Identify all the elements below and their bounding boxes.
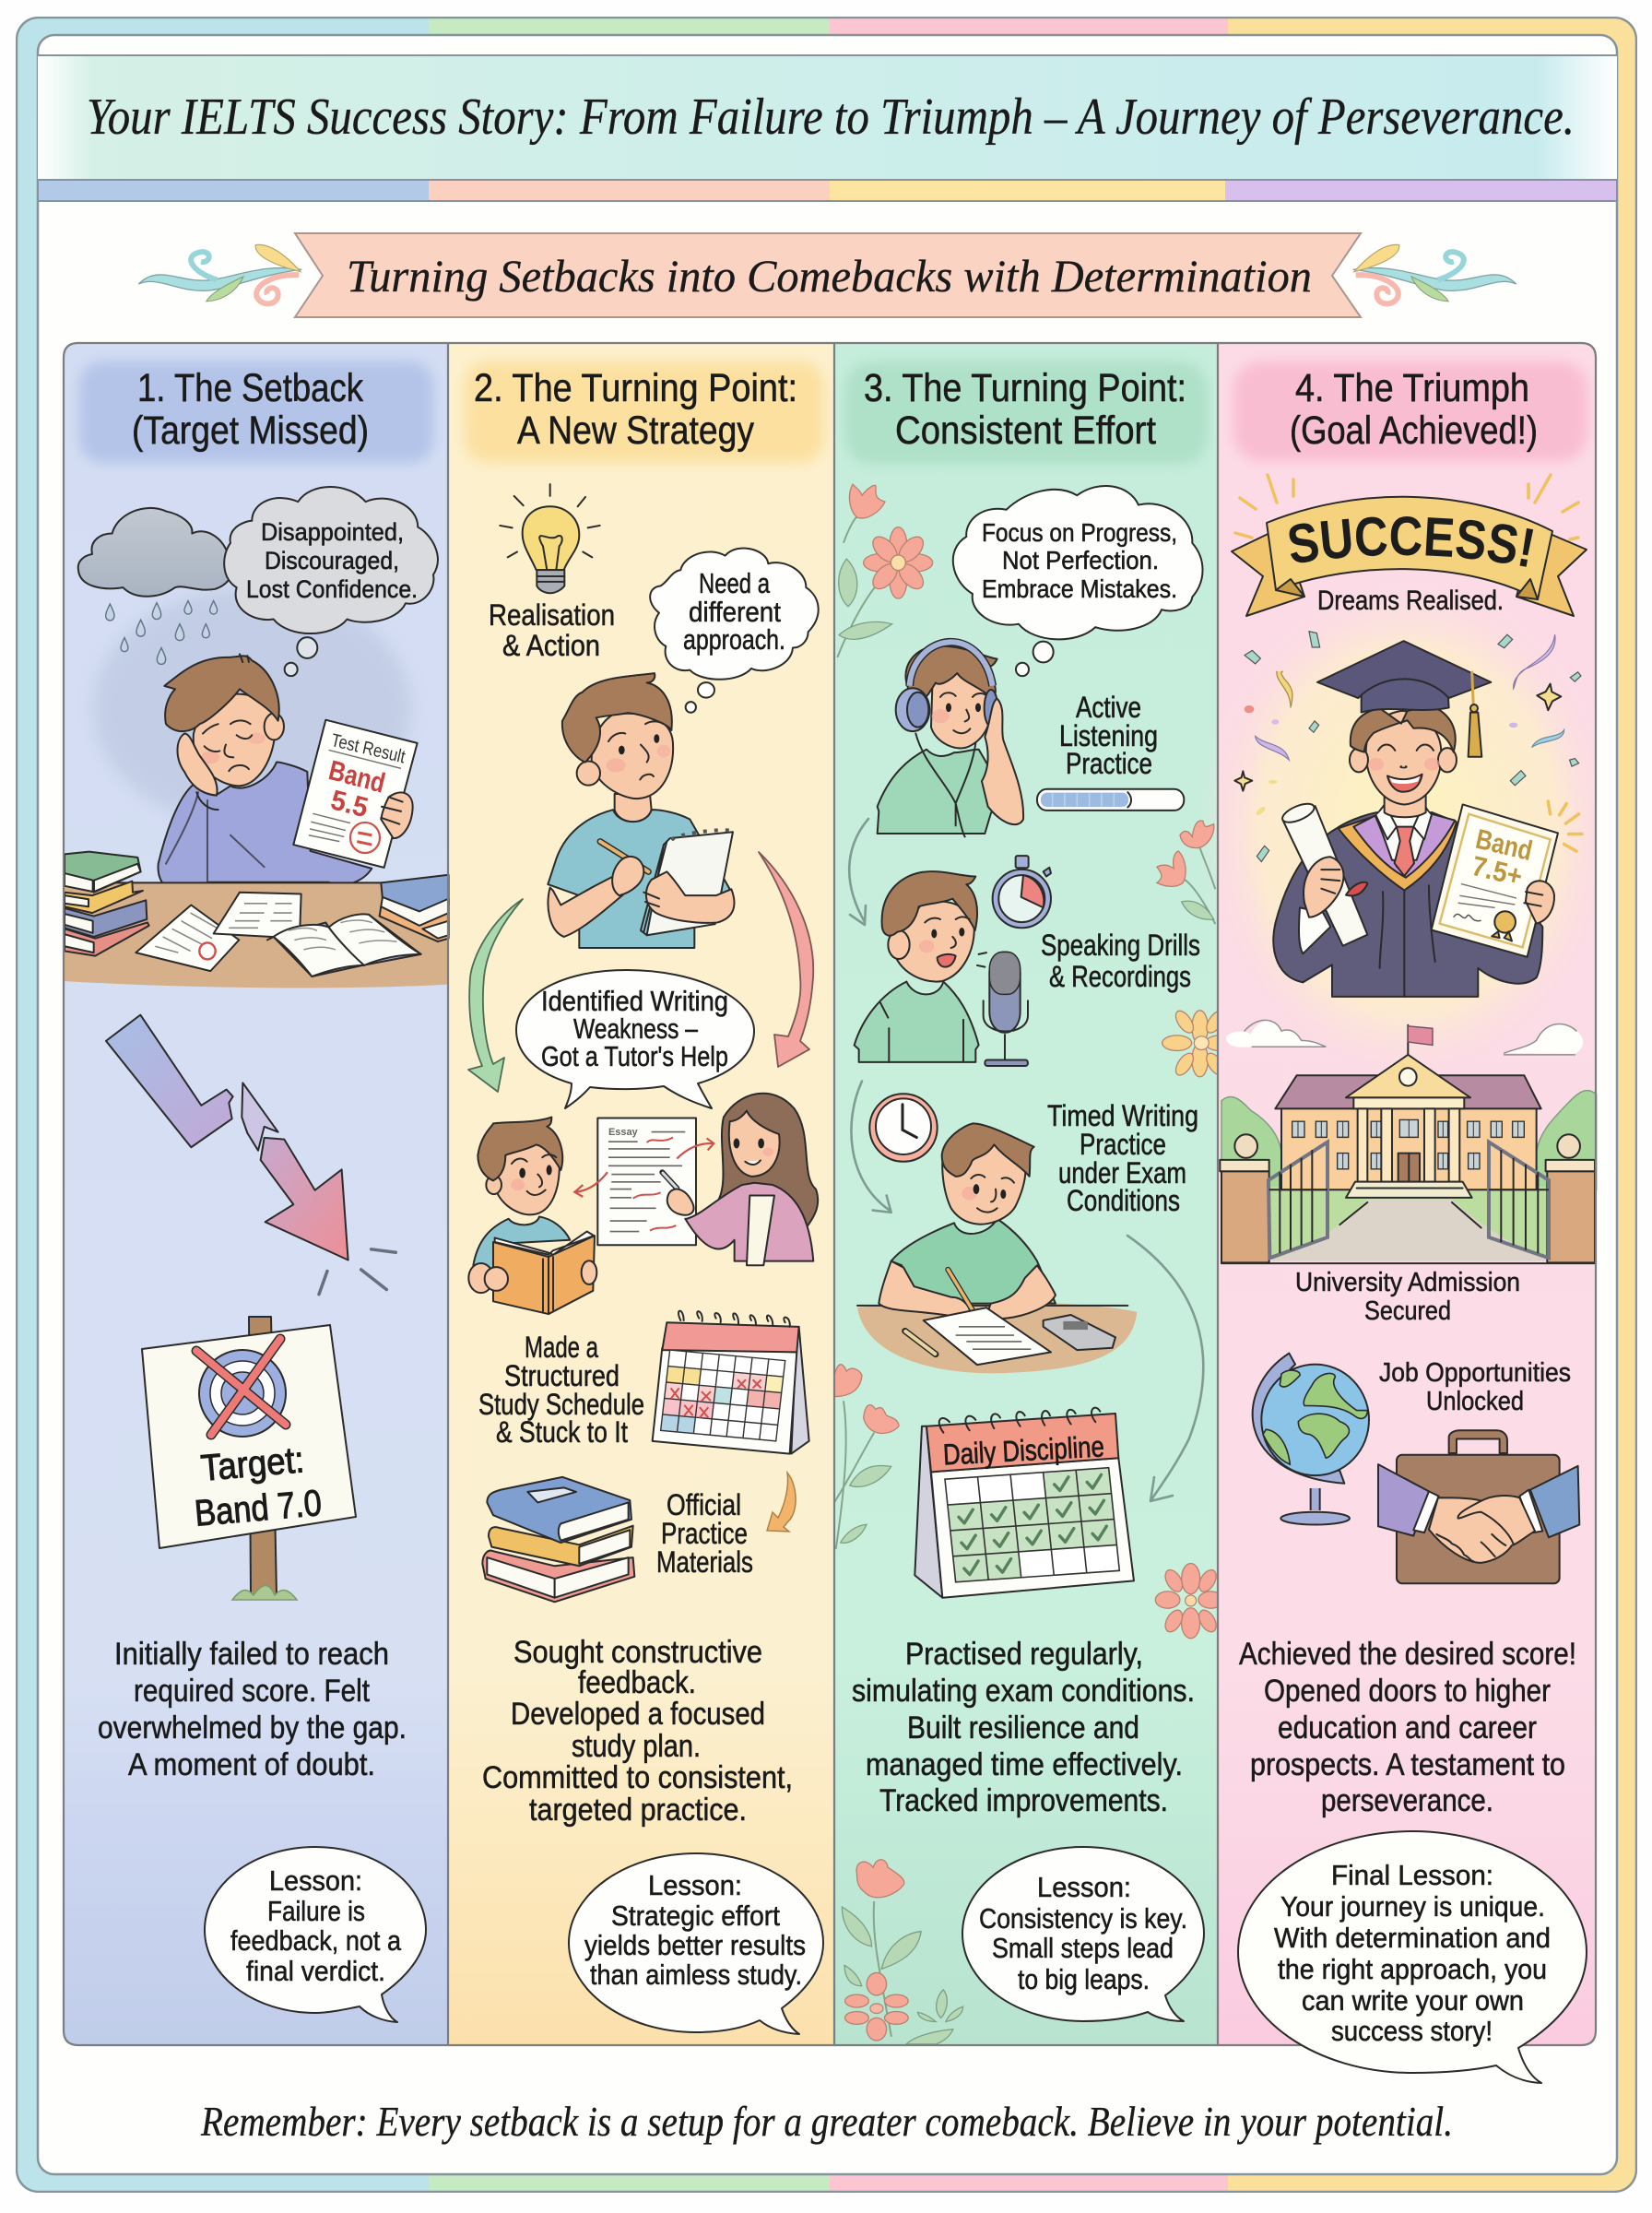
label: university admission <box>1295 1268 1520 1326</box>
thought bubble: need a different approach: different <box>689 596 781 628</box>
body text 2: study plan. <box>572 1729 701 1764</box>
illustration: graduate with certificate: Band <box>1473 823 1535 867</box>
label: university admission: Secured <box>1364 1296 1451 1326</box>
label: active listening: Active <box>1076 691 1141 724</box>
panel backgrounds <box>64 343 1621 2045</box>
heading 1: 1. The Setback <box>137 366 363 410</box>
illustration: student speaking into microphone <box>855 871 1028 1066</box>
panel outline and column dividers <box>64 343 1596 2045</box>
label: realisation <box>489 598 615 662</box>
illustration: graduate with certificate <box>1234 632 1582 997</box>
body text 2: feedback. <box>578 1665 696 1700</box>
thought bubble: focus on progress <box>953 486 1203 676</box>
lesson bubble 3 <box>962 1847 1204 2021</box>
illustration: graduate with certificate: 7.5+ <box>1469 850 1525 893</box>
flourish left <box>138 244 301 303</box>
thought bubble text: Lost Confidence. <box>246 575 418 603</box>
illustration: student and tutor reviewing essay <box>468 1094 818 1314</box>
panel: 3 The Turning Point - Consistent Effort <box>834 366 1234 2044</box>
heading 2: A New Strategy <box>517 408 754 453</box>
thought bubble: need a different approach: approach. <box>683 623 785 656</box>
decorative flowers upper <box>837 484 1215 924</box>
label: realisation: & Action <box>502 629 600 662</box>
heading 2 <box>474 366 797 453</box>
thought bubble: focus on progress: Focus on Progress, <box>982 518 1177 547</box>
label: official materials <box>656 1488 753 1579</box>
illustration: student with headphones <box>878 642 1184 836</box>
heading 3: 3. The Turning Point: <box>864 366 1186 410</box>
lesson bubble 2: Lesson: <box>648 1869 742 1901</box>
label: speaking drills <box>1041 929 1200 993</box>
flourish right <box>1353 244 1516 303</box>
label: structured schedule: Study Schedule <box>478 1388 644 1421</box>
lesson bubble 4: can write your own <box>1302 1984 1524 2017</box>
lesson bubble 3: to big leaps. <box>1018 1963 1150 1995</box>
label: active listening: Listening <box>1059 719 1158 752</box>
label: speaking drills: Speaking Drills <box>1041 929 1200 962</box>
thought bubble: focus on progress: Embrace Mistakes. <box>982 574 1177 603</box>
label: job opportunities: Unlocked <box>1426 1387 1524 1416</box>
body text 3: Practised regularly, <box>905 1637 1143 1672</box>
body text 3: managed time effectively. <box>866 1747 1183 1782</box>
body text 2: targeted practice. <box>529 1793 747 1828</box>
lesson bubble 4: Your journey is unique. <box>1280 1890 1545 1923</box>
label: official materials: Practice <box>661 1517 748 1550</box>
panel: 4 The Triumph <box>1219 341 1597 1855</box>
body text 2: Committed to consistent, <box>482 1760 793 1795</box>
illustration: student and tutor reviewing essay: Essay <box>608 1127 638 1138</box>
speech bubble: identified writing weakness <box>516 970 754 1108</box>
label: job opportunities: Job Opportunities <box>1379 1358 1571 1388</box>
label: timed writing: Timed Writing <box>1047 1099 1198 1132</box>
lesson bubble 3: Lesson: <box>1037 1871 1131 1903</box>
label: official materials: Materials <box>656 1545 753 1579</box>
heading 3 <box>864 366 1186 453</box>
lesson bubble 1 <box>205 1847 426 2022</box>
lesson bubble 2 <box>569 1853 823 2034</box>
body text 3: simulating exam conditions. <box>852 1674 1195 1709</box>
illustration: writing practice <box>851 1082 1137 1373</box>
lesson bubble 3: Consistency is key. <box>979 1902 1187 1935</box>
success banner <box>1231 473 1587 617</box>
label: active listening <box>1059 691 1158 780</box>
thought bubble: need a different approach <box>650 548 819 713</box>
icon: light bulb <box>500 484 600 593</box>
arrow: flow down to calendar <box>1127 1236 1203 1501</box>
lesson bubble 4 <box>1238 1831 1587 2083</box>
arrow: red curved <box>759 852 813 1067</box>
body text 3 <box>852 1637 1195 1818</box>
flowers beside lesson 3 <box>842 1860 963 2044</box>
icon: globe <box>1253 1354 1369 1525</box>
title band <box>38 55 1617 201</box>
label: timed writing: under Exam <box>1058 1156 1186 1189</box>
thought bubble: need a different approach: Need a <box>699 567 771 599</box>
decorative flowers lower <box>834 1007 1234 1639</box>
body text 1: A moment of doubt. <box>128 1747 375 1782</box>
subtitle ribbon <box>295 233 1361 317</box>
body text 4: education and career <box>1278 1710 1537 1746</box>
label: structured schedule: & Stuck to It <box>496 1415 628 1449</box>
lesson bubble 4: the right approach, you <box>1278 1953 1547 1985</box>
lesson bubble 1: Lesson: <box>269 1864 362 1897</box>
sign: target band 7.0: Target: <box>199 1439 306 1489</box>
heading 2: 2. The Turning Point: <box>474 366 797 410</box>
lesson bubble 3: Small steps lead <box>992 1932 1174 1964</box>
heading 3: Consistent Effort <box>895 408 1156 453</box>
subtitle: Turning Setbacks into Comebacks with Determination <box>347 250 1312 302</box>
label: official materials: Official <box>667 1488 741 1521</box>
heading 1: (Target Missed) <box>132 408 369 453</box>
lesson bubble 4: Final Lesson: <box>1331 1859 1493 1891</box>
heading 4: (Goal Achieved!) <box>1290 408 1538 453</box>
body text 2: Developed a focused <box>511 1697 765 1732</box>
body text 4: prospects. A testament to <box>1250 1747 1565 1782</box>
icon: book stack <box>482 1477 634 1602</box>
body text 4 <box>1239 1637 1576 1818</box>
label: speaking drills: & Recordings <box>1049 960 1191 993</box>
label: timed writing: Practice <box>1080 1128 1166 1161</box>
sign: target band 7.0 <box>142 1317 356 1600</box>
lesson bubble 1: final verdict. <box>246 1955 385 1987</box>
label: timed writing: Conditions <box>1067 1184 1180 1217</box>
arrow: small orange <box>767 1473 796 1532</box>
body text 1 <box>98 1637 407 1782</box>
lesson bubble 1: Failure is <box>267 1895 365 1927</box>
speech bubble: identified writing weakness: Weakness – <box>573 1012 699 1045</box>
panel: 1 The Setback <box>65 366 449 2022</box>
thought bubble text: Disappointed, <box>261 518 404 546</box>
body text 2: Sought constructive <box>513 1635 762 1670</box>
label: structured schedule <box>478 1331 644 1449</box>
sign: target band 7.0: Band 7.0 <box>193 1483 324 1534</box>
arrow: flow down 1 <box>849 819 868 925</box>
illustration: sad student at desk: 5.5 <box>328 785 371 823</box>
label: job opportunities <box>1379 1358 1571 1416</box>
footer message: Remember: Every setback is a setup for a greater comeback. Believe in your potential. <box>200 2099 1453 2145</box>
label: university admission: University Admission <box>1295 1268 1520 1297</box>
thought bubble: focus on progress: Not Perfection. <box>1002 546 1159 574</box>
body text 4: Achieved the desired score! <box>1239 1637 1576 1672</box>
body text 3: Built resilience and <box>907 1710 1139 1746</box>
body text 1: required score. Felt <box>134 1674 370 1709</box>
illustration: sad student at desk: Band <box>325 755 388 799</box>
body text 4: perseverance. <box>1321 1783 1493 1818</box>
icon: broken downward arrow <box>106 1015 395 1295</box>
success banner: SUCCESS! <box>1289 516 1534 567</box>
lesson bubble 4: success story! <box>1331 2015 1493 2047</box>
lesson bubble 2: Strategic effort <box>611 1899 780 1932</box>
body text 1: Initially failed to reach <box>114 1637 389 1672</box>
label: active listening: Practice <box>1066 747 1152 780</box>
lesson bubble 2: than aimless study. <box>590 1959 802 1991</box>
body text 1: overwhelmed by the gap. <box>98 1710 407 1746</box>
body text 4: Opened doors to higher <box>1264 1674 1551 1709</box>
speech bubble: identified writing weakness: Got a Tutor's Help <box>541 1040 728 1072</box>
icon: briefcase with handshake <box>1378 1430 1579 1583</box>
speech bubble: identified writing weakness: Identified Writing <box>541 985 728 1017</box>
label: realisation: Realisation <box>489 598 615 632</box>
icon: daily discipline calendar: Daily Discipline <box>942 1429 1105 1472</box>
lesson bubble 2: yields better results <box>584 1929 806 1961</box>
lesson bubble 4: With determination and <box>1274 1922 1551 1954</box>
illustration: university and open gates <box>1220 1020 1597 1263</box>
illustration: sad student at desk <box>65 487 449 988</box>
heading 1 <box>132 366 369 453</box>
label: structured schedule: Structured <box>504 1359 620 1392</box>
lesson bubble 1: feedback, not a <box>230 1924 402 1957</box>
label: structured schedule: Made a <box>525 1331 598 1364</box>
body text 2 <box>482 1635 793 1828</box>
heading 4: 4. The Triumph <box>1295 366 1529 410</box>
illustration: thinking student with notebook <box>548 673 734 948</box>
icon: study calendar <box>653 1311 809 1454</box>
icon: daily discipline calendar <box>914 1408 1134 1598</box>
body text 3: Tracked improvements. <box>879 1783 1168 1818</box>
label: timed writing <box>1047 1099 1198 1217</box>
thought bubble text <box>246 518 418 603</box>
panel: 2 The Turning Point - A New Strategy <box>468 366 823 2034</box>
icon: stopwatch <box>993 856 1051 928</box>
heading 4 <box>1290 366 1538 453</box>
thought bubble text: Discouraged, <box>265 547 399 574</box>
dreams realised: Dreams Realised. <box>1317 586 1504 616</box>
arrow: green curved <box>468 899 523 1092</box>
illustration: sad student at desk: Test Result <box>329 730 407 768</box>
